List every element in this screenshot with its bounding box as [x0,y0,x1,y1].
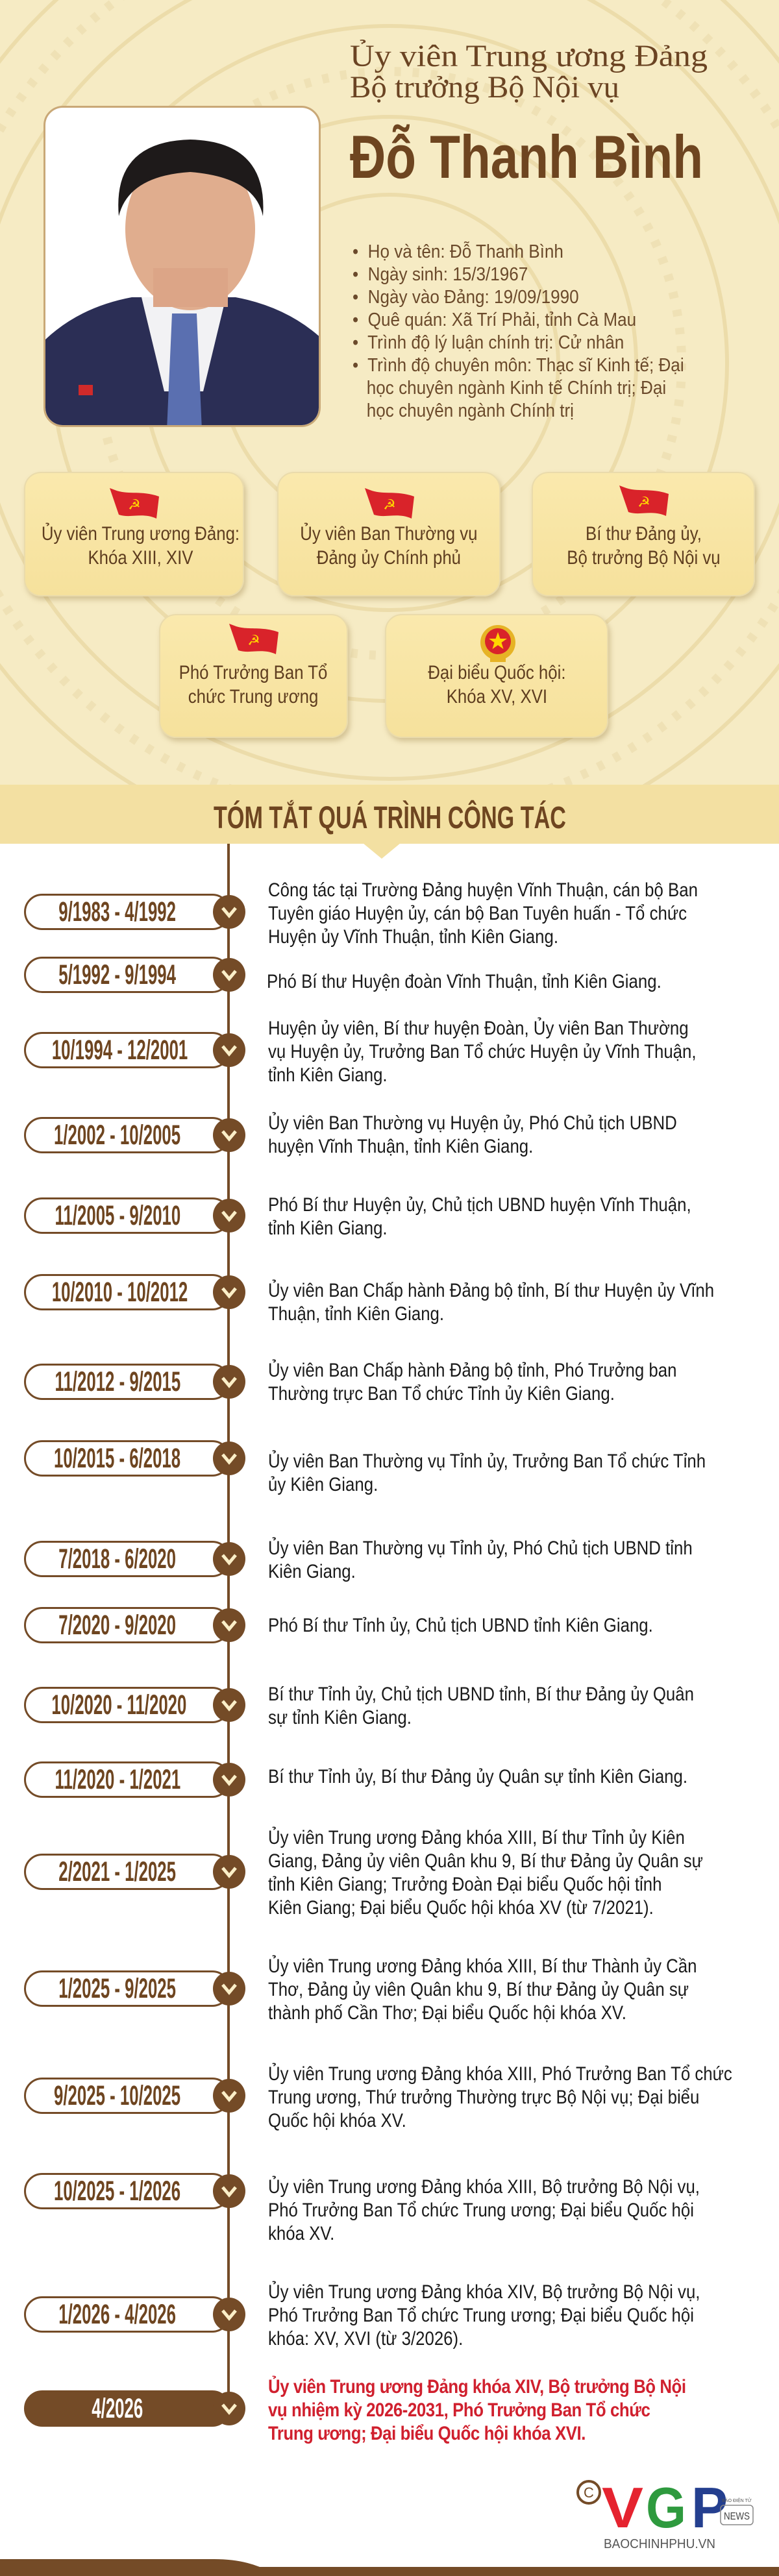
timeline entry 8: Ủy viên Ban Thường vụ Tỉnh ủy, Trưởng Ban Tổ chức Tỉnh [268,1451,706,1472]
timeline entry 7: Ủy viên Ban Chấp hành Đảng bộ tỉnh, Phó Trưởng ban [268,1360,676,1381]
logo: VGP [576,2478,754,2551]
icon: party flag: ☭ [128,497,141,513]
timeline entry 3: tỉnh Kiên Giang. [268,1064,388,1086]
timeline entry 2 [24,957,662,993]
timeline entry 7: Thường trực Ban Tổ chức Tỉnh ủy Kiên Giang. [268,1383,615,1405]
timeline entry 2: Phó Bí thư Huyện đoàn Vĩnh Thuận, tỉnh Kiên Giang. [267,971,662,992]
card: Dai bieu Quoc hoi [385,614,608,738]
icon: party flag: ☭ [637,495,650,511]
card: Uy vien Trung uong [24,472,244,596]
timeline entry 12: Bí thư Tỉnh ủy, Bí thư Đảng ủy Quân sự tỉnh Kiên Giang. [268,1766,687,1787]
card: Ban Thuong vu Dang uy Chinh phu [277,472,501,596]
icon: party flag: ☭ [383,497,396,513]
personal info bullets: • Họ và tên: Đỗ Thanh Bình [352,241,563,262]
timeline entry 3: vụ Huyện ủy, Trưởng Ban Tổ chức Huyện ủy Vĩnh Thuận, [268,1041,697,1062]
timeline entry 11: sự tỉnh Kiên Giang. [268,1707,412,1728]
card: Bi thu, Bo truong: Bí thư Đảng ủy, [586,523,701,545]
timeline entry 13 [24,1826,703,1919]
timeline entry 14: 1/2025 - 9/2025 [59,1973,176,2004]
personal info bullets [352,241,684,421]
card: Pho Truong Ban To chuc: chức Trung ương [188,686,319,707]
timeline entry 9 [24,1537,693,1582]
logo: VGP: NEWS [724,2511,750,2522]
timeline entry 4 [24,1112,677,1157]
timeline entry 4: huyện Vĩnh Thuận, tỉnh Kiên Giang. [268,1136,533,1157]
timeline entry 15: Quốc hội khóa XV. [268,2110,406,2131]
timeline entry 1: Công tác tại Trường Đảng huyện Vĩnh Thuận, cán bộ Ban [268,879,698,901]
timeline entry 18 current: Ủy viên Trung ương Đảng khóa XIV, Bộ trưởng Bộ Nội [268,2376,686,2398]
timeline entry 7: 11/2012 - 9/2015 [55,1366,180,1397]
timeline entry 18 current: vụ nhiệm kỳ 2026-2031, Phó Trưởng Ban Tổ chức [268,2399,650,2421]
timeline entry 15 [24,2063,732,2131]
timeline entry 16: khóa XV. [268,2223,334,2244]
personal info bullets: học chuyên ngành Chính trị [367,400,574,421]
logo: VGP: C [584,2484,594,2501]
personal info bullets: • Ngày vào Đảng: 19/09/1990 [352,287,579,308]
timeline entry 6: Thuận, tỉnh Kiên Giang. [268,1303,444,1325]
timeline entry 13: tỉnh Kiên Giang; Trưởng Đoàn Đại biểu Quốc hội tỉnh [268,1874,662,1895]
timeline entry 4: 1/2002 - 10/2005 [54,1120,181,1151]
timeline entry 5 [24,1194,691,1239]
timeline [227,844,230,2392]
icon: party flag: ☭ [247,633,260,649]
timeline entry 5: 11/2005 - 9/2010 [55,1200,180,1231]
timeline entry 12: 11/2020 - 1/2021 [55,1764,180,1795]
icon: national emblem [480,625,515,662]
timeline entry 15: Trung ương, Thứ trưởng Thường trực Bộ Nội vụ; Đại biểu [268,2087,699,2108]
timeline entry 6 [24,1274,714,1325]
timeline entry 13: Kiên Giang; Đại biểu Quốc hội khóa XV (từ 7/2021). [268,1897,654,1919]
personal info bullets: • Trình độ chuyên môn: Thạc sĩ Kinh tế; Đại [352,355,684,376]
timeline entry 1: Huyện ủy Vĩnh Thuận, tỉnh Kiên Giang. [268,926,558,948]
card: Bi thu, Bo truong: Bộ trưởng Bộ Nội vụ [567,547,720,569]
timeline entry 4: Ủy viên Ban Thường vụ Huyện ủy, Phó Chủ tịch UBND [268,1112,677,1134]
timeline entry 14: thành phố Cần Thơ; Đại biểu Quốc hội khóa XV. [268,2002,626,2024]
timeline entry 1: Tuyên giáo Huyện ủy, cán bộ Ban Tuyên huấn - Tổ chức [268,903,687,924]
card: Dai bieu Quoc hoi: Khóa XV, XVI [446,686,547,707]
icon: party flag [365,488,414,519]
timeline entry 9: Kiên Giang. [268,1561,356,1582]
timeline entry 13: Giang, Đảng ủy viên Quân khu 9, Bí thư Đảng ủy Quân sự [268,1850,703,1872]
timeline entry 17: khóa: XV, XVI (từ 3/2026). [268,2328,463,2349]
icon: party flag [110,488,159,519]
section heading band: TÓM TẮT QUÁ TRÌNH CÔNG TÁC [214,800,566,835]
timeline entry 11: 10/2020 - 11/2020 [51,1689,186,1721]
timeline entry 10 [24,1607,653,1643]
card: Uy vien Trung uong: Ủy viên Trung ương Đảng: [42,523,240,545]
timeline entry 5: tỉnh Kiên Giang. [268,1218,388,1239]
footer band [0,2559,779,2576]
timeline entry 15: 9/2025 - 10/2025 [54,2080,181,2111]
timeline entry 14 [24,1955,697,2024]
timeline entry 2: 5/1992 - 9/1994 [59,959,176,990]
timeline entry 1 [24,879,698,948]
timeline entry 7 [24,1359,676,1405]
timeline entry 9: 7/2018 - 6/2020 [59,1543,176,1575]
timeline entry 6: Ủy viên Ban Chấp hành Đảng bộ tỉnh, Bí thư Huyện ủy Vĩnh [268,1280,714,1301]
personal info bullets: • Ngày sinh: 15/3/1967 [352,264,528,285]
card: Ban Thuong vu Dang uy Chinh phu: Đảng ủy Chính phủ [317,547,461,569]
timeline entry 9: Ủy viên Ban Thường vụ Tỉnh ủy, Phó Chủ tịch UBND tỉnh [268,1538,693,1559]
timeline entry 5: Phó Bí thư Huyện ủy, Chủ tịch UBND huyện Vĩnh Thuận, [268,1194,691,1216]
timeline entry 1: 9/1983 - 4/1992 [59,896,176,927]
timeline entry 16: Ủy viên Trung ương Đảng khóa XIII, Bộ trưởng Bộ Nội vụ, [268,2176,700,2198]
portrait photo [43,106,321,427]
timeline entry 17 [24,2281,700,2349]
logo: VGP: BÁO ĐIỆN TỬ [722,2497,752,2503]
card: Ban Thuong vu Dang uy Chinh phu: Ủy viên Ban Thường vụ [300,523,478,545]
timeline entry 18 current: Trung ương; Đại biểu Quốc hội khóa XVI. [268,2423,586,2444]
timeline entry 11: Bí thư Tỉnh ủy, Chủ tịch UBND tỉnh, Bí thư Đảng ủy Quân [268,1684,694,1705]
timeline entry 11 [24,1684,694,1728]
personal info bullets: học chuyên ngành Kinh tế Chính trị; Đại [367,378,666,399]
timeline entry 17: Phó Trưởng Ban Tổ chức Trung ương; Đại biểu Quốc hội [268,2305,694,2326]
timeline entry 16 [24,2173,700,2244]
timeline entry 8: 10/2015 - 6/2018 [54,1443,181,1474]
timeline entry 6: 10/2010 - 10/2012 [52,1277,188,1308]
timeline entry 14: Thơ, Đảng ủy viên Quân khu 9, Bí thư Đảng ủy Quân sự [268,1979,689,2000]
timeline entry 10: 7/2020 - 9/2020 [59,1610,176,1641]
section heading band [0,785,779,859]
card: Uy vien Trung uong: Khóa XIII, XIV [88,547,193,569]
timeline entry 13: Ủy viên Trung ương Đảng khóa XIII, Bí thư Tỉnh ủy Kiên [268,1827,685,1848]
timeline entry 16: Phó Trưởng Ban Tổ chức Trung ương; Đại biểu Quốc hội [268,2200,694,2221]
card: Dai bieu Quoc hoi: Đại biểu Quốc hội: [428,662,565,683]
card: Pho Truong Ban To chuc: Phó Trưởng Ban Tổ [179,662,328,683]
personal info bullets: • Quê quán: Xã Trí Phải, tỉnh Cà Mau [352,310,636,330]
card: Pho Truong Ban To chuc [159,614,348,738]
timeline entry 3: Huyện ủy viên, Bí thư huyện Đoàn, Ủy viên Ban Thường [268,1018,689,1039]
card: Bi thu, Bo truong [532,472,755,596]
title: Ủy viên Trung ương Đảng [350,39,708,73]
timeline entry 17: Ủy viên Trung ương Đảng khóa XIV, Bộ trưởng Bộ Nội vụ, [268,2281,700,2303]
timeline entry 8 [24,1440,706,1495]
timeline entry 16: 10/2025 - 1/2026 [54,2176,181,2207]
timeline entry 13: 2/2021 - 1/2025 [59,1856,176,1887]
title [350,39,708,188]
timeline entry 12 [24,1761,687,1798]
title: Bộ trưởng Bộ Nội vụ [350,70,619,104]
icon: party flag [619,485,669,516]
timeline entry 15: Ủy viên Trung ương Đảng khóa XIII, Phó Trưởng Ban Tổ chức [268,2063,732,2085]
timeline entry 10: Phó Bí thư Tỉnh ủy, Chủ tịch UBND tỉnh Kiên Giang. [268,1615,653,1636]
timeline entry 17: 1/2026 - 4/2026 [59,2299,176,2330]
timeline entry 14: Ủy viên Trung ương Đảng khóa XIII, Bí thư Thành ủy Cần [268,1956,697,1977]
personal info bullets: • Trình độ lý luận chính trị: Cử nhân [352,332,624,353]
timeline entry 3 [24,1018,697,1086]
timeline entry 3: 10/1994 - 12/2001 [52,1035,188,1066]
timeline entry 18 current [24,2375,686,2444]
icon: party flag [229,624,278,654]
header background [0,0,779,844]
timeline entry 8: ủy Kiên Giang. [268,1474,378,1495]
timeline entry 18 current: 4/2026 [92,2393,143,2424]
